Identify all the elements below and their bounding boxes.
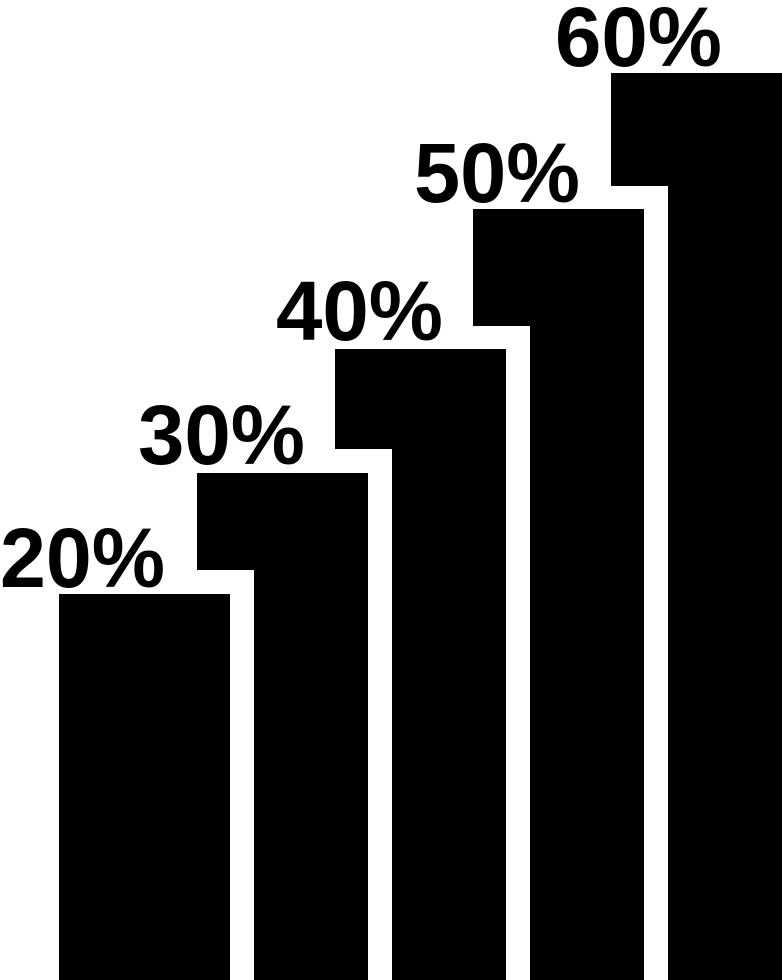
label: 20%: 20% [0,511,165,605]
bar: 60% [611,73,782,980]
bar: 20% [59,594,230,980]
label: 50%: 50% [414,126,580,220]
bar: 30% [197,473,368,980]
label: 30%: 30% [138,388,305,482]
bar: 40% [335,349,506,980]
bar: 50% [473,209,644,980]
label: 40%: 40% [276,264,443,358]
